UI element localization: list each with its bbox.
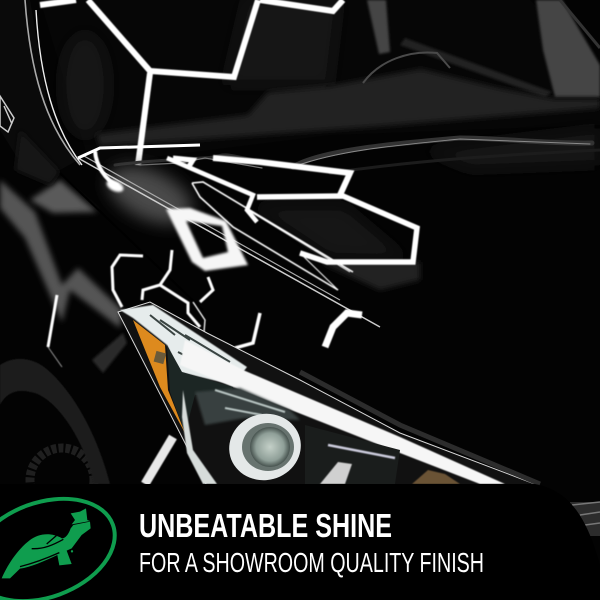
diamond reflection [166,208,248,271]
arch [0,359,110,484]
wheel arch and tire [0,359,110,512]
tire [30,448,94,512]
fender white streaks [48,295,173,484]
projector lens [222,406,308,488]
fender soft reflections [0,130,127,373]
windshield and car interior [0,0,600,170]
eye dot [71,550,73,552]
hood top sheen at right [420,128,600,170]
logo ring [0,480,129,600]
wipers [115,138,600,173]
chrome shading strips [150,315,232,380]
chrome inner strip [182,390,217,484]
bumper chrome at right [570,502,600,536]
hood crease lines [60,145,380,327]
amber indicator [133,320,185,433]
logo: turtle in green ring [0,480,129,600]
chrome upper area [120,305,247,385]
shell line [20,535,63,567]
headline: UNBEATABLE SHINE [139,508,392,545]
lower chrome details [305,425,460,484]
chrome streaks over lens [195,388,300,425]
hood hexagon reflection [95,151,417,290]
turtle hat [71,508,90,524]
indicator detail [154,351,166,364]
white light band [180,340,505,484]
headlight housing [118,302,540,486]
headlight [118,302,540,488]
windshield hexagon reflection [40,0,343,165]
turtle body [2,522,91,578]
lower left hexagon reflections [112,250,362,348]
hood edge above headlight [300,372,540,484]
dark green inner panel [167,345,233,433]
banner [0,484,600,600]
hood soft reflections [99,154,420,290]
